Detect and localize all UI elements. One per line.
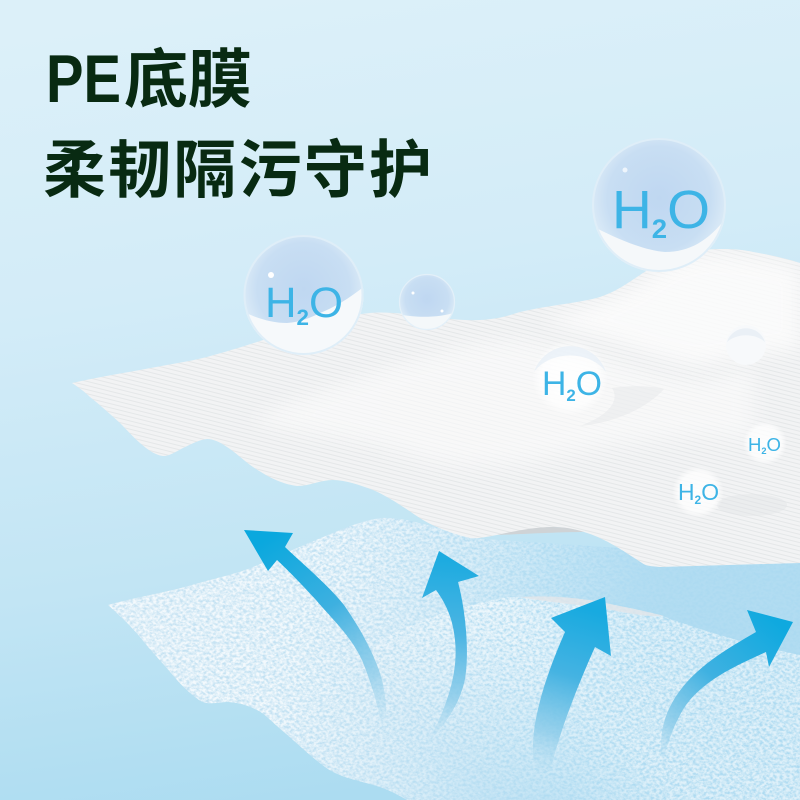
arrow 2 [422,551,479,743]
label: O [309,279,343,327]
fluff over the whole sheet, fading to the upper right [108,518,634,800]
label: H [748,435,761,455]
bubble: H2O lower [672,466,787,518]
bubble: H2O on film [532,340,664,426]
title line 1: PE [46,41,121,117]
front fold of the lower layer [403,597,800,800]
label: 2 [695,493,702,507]
label: 2 [297,305,309,330]
bright hump at upper right [540,255,800,365]
upper layer: white woven PE film [72,249,800,567]
label: 2 [566,386,576,405]
bright front wave [250,340,753,466]
title line 2: 柔韧隔污守护 [43,136,434,206]
bubble: empty droplet on film [726,325,766,365]
lower layer: fluffy nonwoven sheet [90,500,800,800]
label: O [667,180,710,240]
soft highlights on the film [250,255,800,466]
title line 1: 底膜 [124,44,252,116]
woven texture [72,249,800,567]
label: O [767,435,781,455]
bubble: large H2O top right [590,138,728,275]
label: 2 [761,446,767,456]
label: H [542,365,567,403]
arrow 4 [661,610,793,762]
label: 2 [652,214,667,244]
label: H [612,180,651,240]
bubble: small H2O right [743,421,787,465]
arrows [244,530,793,772]
arrow 1 [244,530,386,735]
bubble: large H2O left [240,235,366,360]
gray underside folds [497,527,584,535]
gray shadow under front fold [520,596,664,616]
bubble: small empty [398,274,456,332]
arrow 3 [533,597,611,772]
label: O [701,479,719,505]
label: H [265,279,296,327]
label: H [678,479,695,505]
label: O [576,365,602,403]
title [43,41,434,206]
